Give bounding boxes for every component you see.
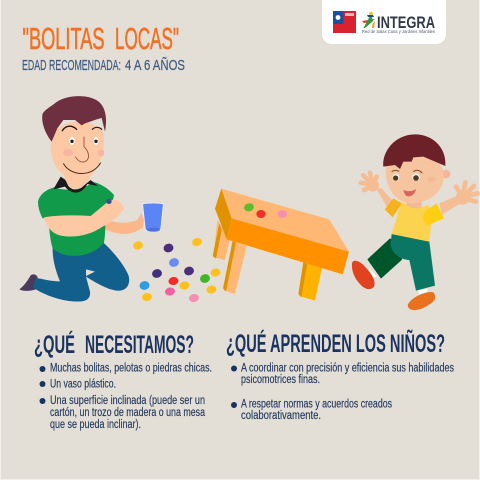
list of materials: Muchas bolitas, pelotas o piedras chicas. xyxy=(50,362,212,374)
right hand xyxy=(456,182,477,202)
list of learnings: colaborativamente. xyxy=(241,410,321,422)
fingers xyxy=(137,213,144,230)
list of materials: cartón, un trozo de madera o una mesa xyxy=(50,407,205,419)
nose xyxy=(75,137,89,162)
right arm xyxy=(439,196,459,215)
title: LOCAS" xyxy=(115,21,179,56)
marbles on table xyxy=(243,202,255,212)
shoe xyxy=(19,274,38,291)
subtitle: recommended age: 4 A 6 AÑOS xyxy=(125,57,185,74)
heading: what we need: ¿QUÉ xyxy=(34,330,75,359)
ear xyxy=(442,170,450,178)
eyes xyxy=(69,137,75,145)
illustration: man kneeling with cup xyxy=(19,96,163,302)
far arm and hand xyxy=(105,213,143,234)
table top xyxy=(221,189,349,252)
mouth xyxy=(403,189,416,196)
list of materials: Una superficie inclinada (puede ser un xyxy=(50,395,205,407)
cup xyxy=(143,203,163,231)
front shoe xyxy=(418,289,427,297)
head xyxy=(51,122,104,182)
list of learnings: A respetar normas y acuerdos creados xyxy=(241,398,392,410)
near arm xyxy=(44,200,124,237)
logo tagline: Red de Salas Cuna y Jardines Infantiles xyxy=(362,29,436,34)
logo panel xyxy=(322,0,446,44)
section: what we need xyxy=(34,330,212,431)
front trouser leg xyxy=(391,234,435,291)
icon: Integra figure xyxy=(362,12,375,28)
front left leg xyxy=(224,242,247,294)
head xyxy=(386,154,444,203)
title: "BOLITAS xyxy=(22,21,104,56)
icon: Chile government flag xyxy=(333,11,356,33)
list of materials xyxy=(40,362,212,431)
left hand xyxy=(361,173,377,190)
smile xyxy=(63,163,101,173)
neck xyxy=(405,198,422,208)
eyes xyxy=(393,174,399,181)
list of materials: Un vaso plástico. xyxy=(50,378,116,390)
shirt xyxy=(392,202,432,242)
list of learnings: psicomotrices finas. xyxy=(241,374,320,386)
left sleeve xyxy=(385,198,402,217)
eyebrows xyxy=(392,170,399,172)
table side edge xyxy=(215,189,232,239)
hair xyxy=(383,134,445,169)
heading: what we need xyxy=(34,330,194,359)
trousers xyxy=(33,243,129,302)
neck xyxy=(64,170,91,189)
heading: what we need: NECESITAMOS? xyxy=(85,331,194,359)
collar xyxy=(53,177,98,193)
right sleeve xyxy=(423,203,444,225)
logo wordmark: INTEGRA xyxy=(377,14,435,32)
marbles xyxy=(132,237,221,303)
illustration: tilted table xyxy=(213,189,349,301)
illustration: jumping boy xyxy=(352,134,477,310)
list of learnings xyxy=(231,362,454,422)
back shoe xyxy=(368,268,377,279)
shirt xyxy=(38,182,114,256)
cheeks xyxy=(63,149,73,156)
subtitle: recommended age: EDAD RECOMENDADA: xyxy=(22,58,121,74)
left arm xyxy=(376,188,393,207)
back leg xyxy=(213,220,230,260)
back trouser leg xyxy=(367,238,407,279)
cheek xyxy=(427,177,436,182)
hair xyxy=(42,96,106,142)
list of materials: que se pueda inclinar). xyxy=(50,419,141,431)
front right leg xyxy=(301,263,322,301)
eyebrows xyxy=(62,126,77,131)
table front edge xyxy=(227,218,349,274)
section: what children learn xyxy=(226,328,454,422)
